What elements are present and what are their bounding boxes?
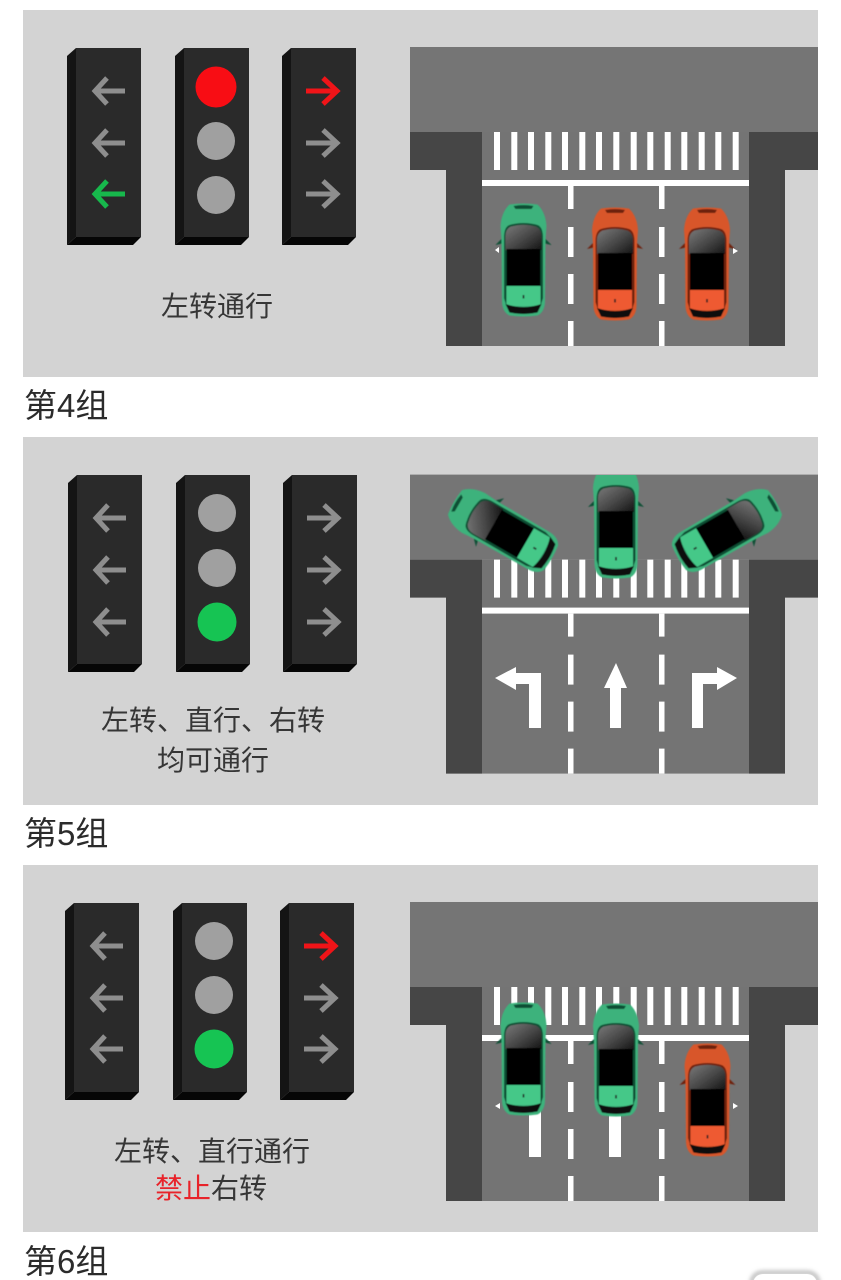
main signal: green light — [176, 475, 250, 672]
floating button fragment — [752, 1273, 818, 1280]
left-turn signal: all off — [65, 903, 139, 1100]
turn signal: green car — [495, 247, 499, 253]
car: green going straight — [588, 466, 644, 578]
car: red right lane — [679, 208, 735, 320]
car: green turning left — [440, 478, 566, 582]
road arrow: right turn — [692, 667, 737, 728]
car: green turning right — [664, 478, 790, 582]
right-turn signal: right arrow red — [282, 48, 356, 245]
main signal: red light — [175, 48, 249, 245]
panel: group 5 — [23, 437, 818, 805]
panel: group 6 — [23, 865, 818, 1232]
panel: group 4 — [23, 10, 818, 377]
caption: all directions go — [101, 705, 325, 776]
road arrow: straight — [604, 663, 627, 728]
intersection diagram: all cars go — [410, 466, 818, 774]
road arrow: left turn — [495, 667, 541, 728]
main signal: green light — [173, 903, 247, 1100]
car: red right lane — [680, 1044, 736, 1156]
turn signal: red car — [733, 248, 738, 254]
lane marking: middle lane bar — [609, 1110, 621, 1157]
car: green left lane — [496, 204, 552, 316]
caption: left turn go: 左转通行 — [161, 291, 273, 322]
caption: all directions go: 均可通行 — [157, 745, 269, 776]
right-turn signal: right arrow red — [280, 903, 354, 1100]
heading: group 4: 第4组 — [24, 387, 108, 424]
car: green middle lane — [588, 1004, 644, 1116]
lane marking: left lane bar — [529, 1110, 541, 1157]
left-turn signal: all off — [68, 475, 142, 672]
heading: group 6: 第6组 — [24, 1243, 108, 1280]
left-turn signal: left arrow green — [67, 48, 141, 245]
intersection diagram: left car goes — [410, 47, 818, 346]
car: green left lane — [496, 1002, 552, 1116]
caption: left and straight go, right forbidden — [114, 1136, 310, 1204]
caption: left and straight go, right forbidden: 左转、直行通行 — [114, 1136, 310, 1167]
turn signal: red car — [733, 1103, 738, 1109]
caption: left and straight go, right forbidden: 禁止右转 — [155, 1173, 267, 1204]
heading: group 5: 第5组 — [24, 815, 108, 852]
right-turn signal: all off — [283, 475, 357, 672]
intersection diagram: left and straight cars go — [410, 902, 818, 1201]
caption: all directions go: 左转、直行、右转 — [101, 705, 325, 736]
turn signal: green car — [495, 1103, 500, 1109]
car: red middle lane — [587, 208, 643, 320]
